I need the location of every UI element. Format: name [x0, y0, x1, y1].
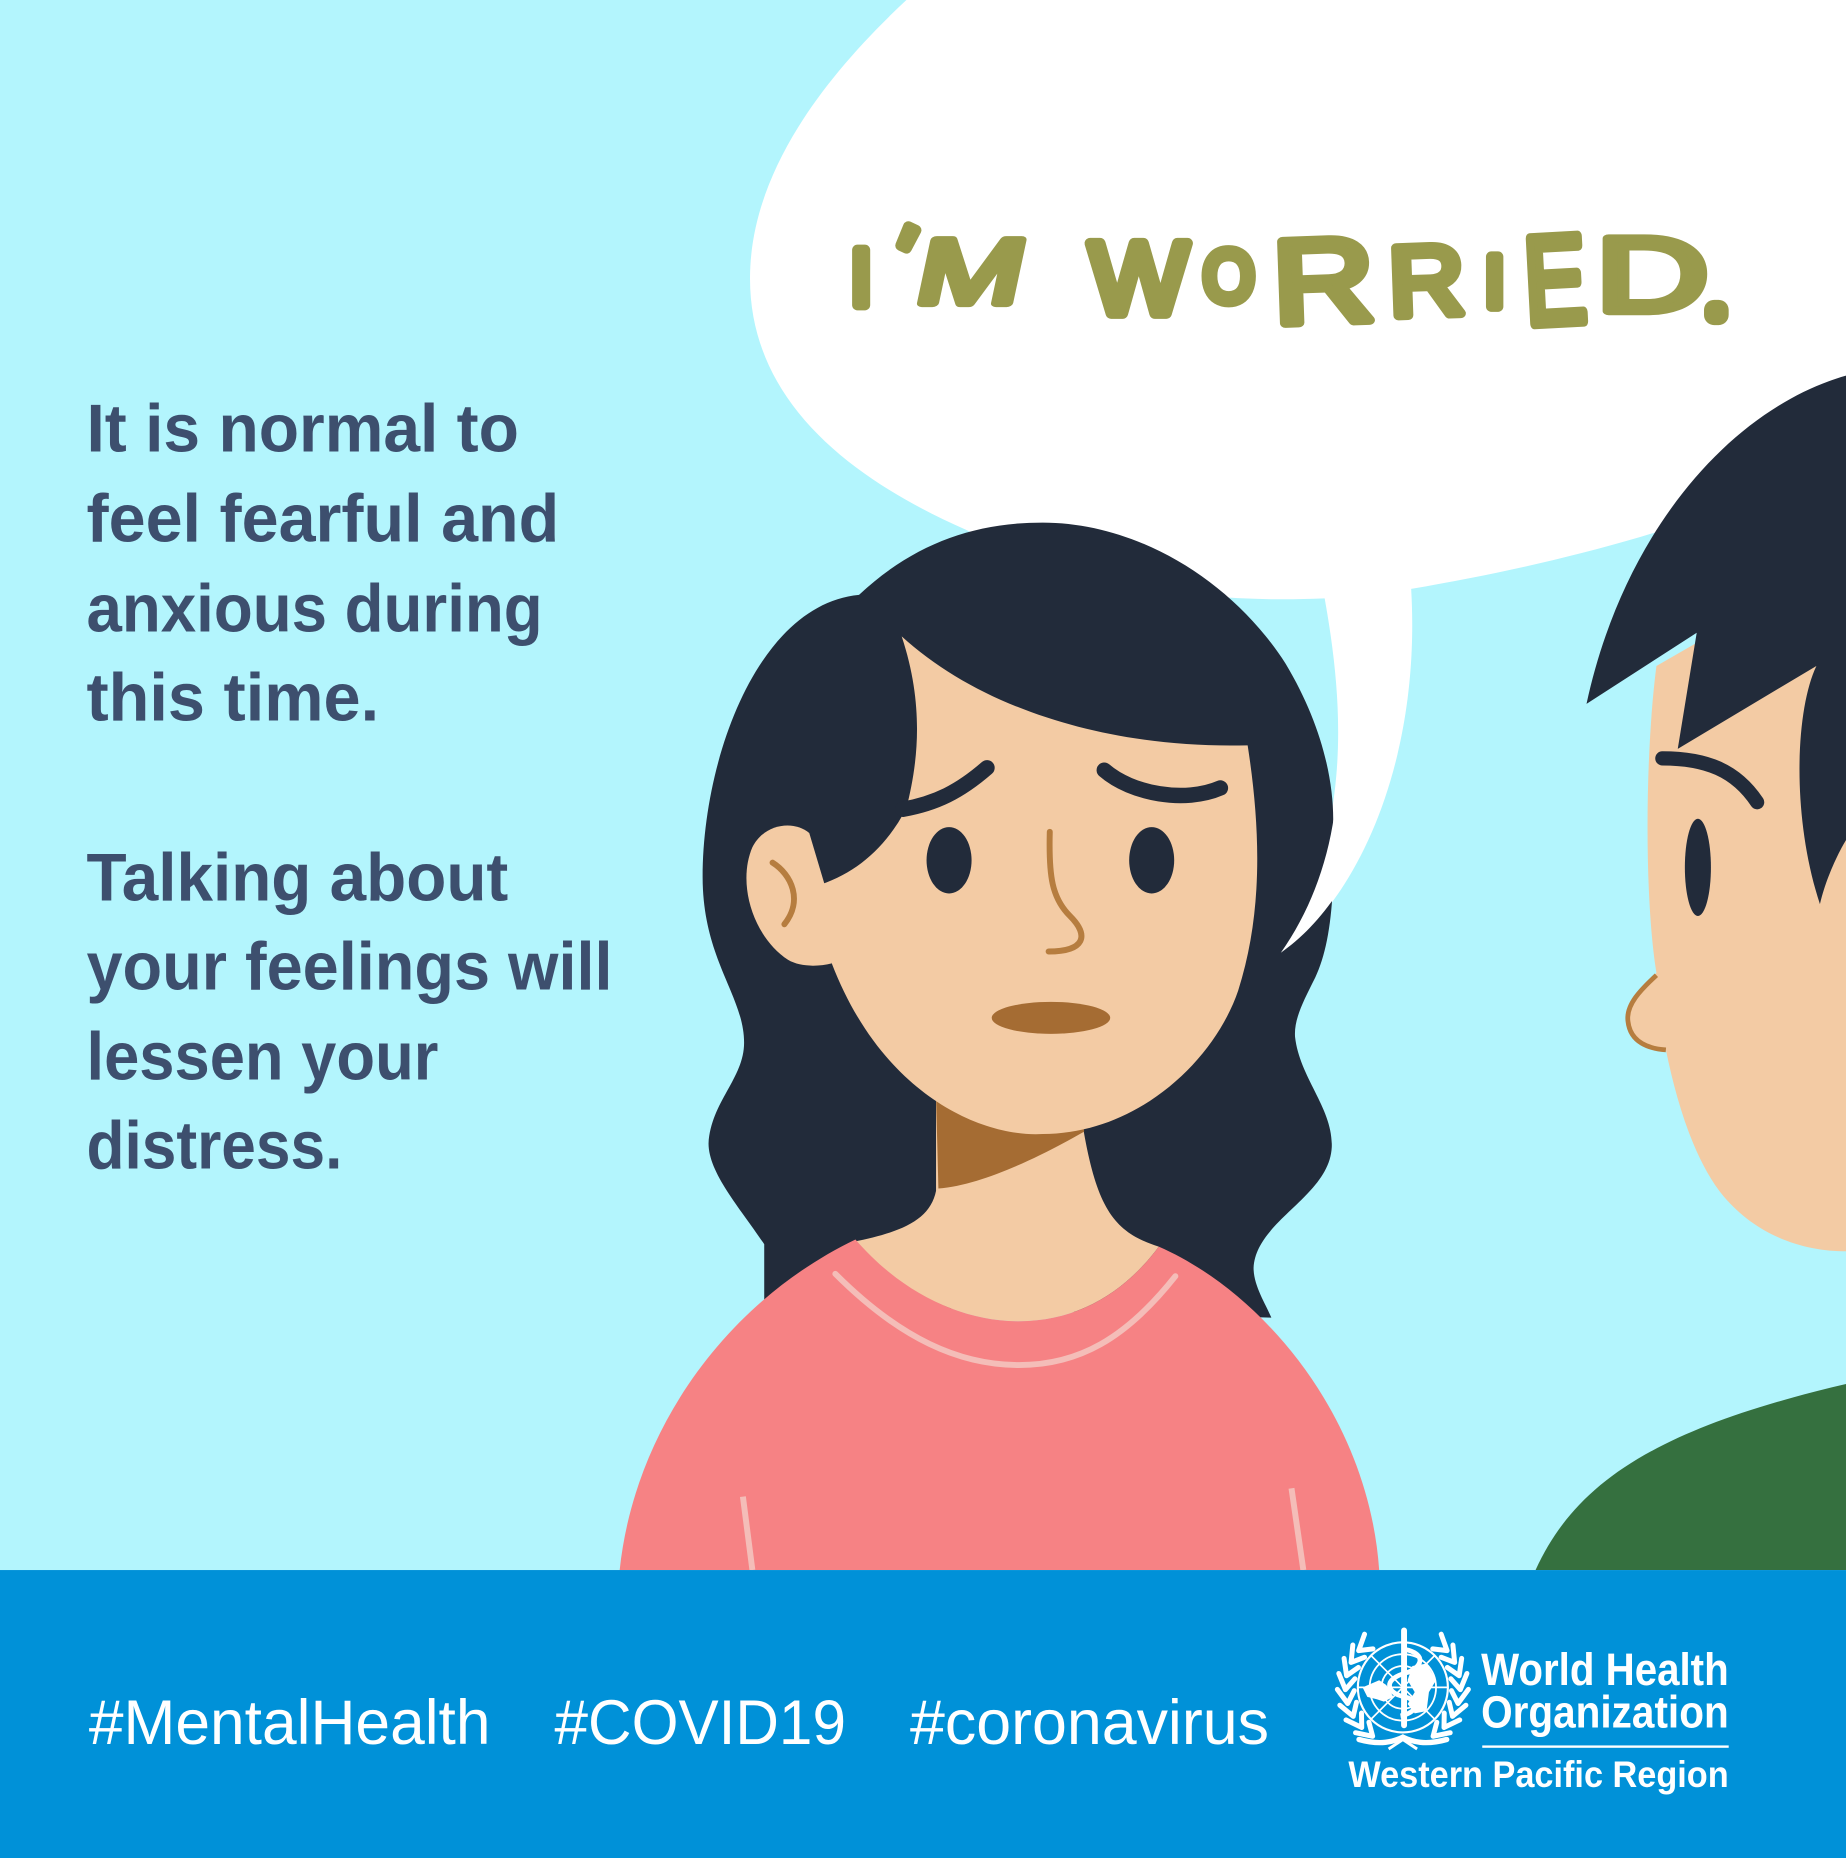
speech text: I'm worried: ' [868, 207, 929, 310]
hashtags: #COVID19 [555, 1688, 846, 1758]
woman hair back [703, 523, 1333, 1318]
WHO name: Western Pacific Region [1348, 1754, 1729, 1795]
man eyebrow [1662, 758, 1757, 802]
body text: anxious during [86, 572, 543, 647]
footer band [0, 1570, 1846, 1858]
speech text: I'm worried: R [1270, 214, 1377, 349]
body text: your feelings will [86, 929, 613, 1004]
hashtags [89, 1688, 1269, 1758]
speech text: I'm worried: I [1485, 242, 1505, 322]
woman ear [746, 826, 832, 966]
man face [1628, 557, 1846, 1251]
man shirt [1536, 1384, 1846, 1570]
speech bubble tail tip over hair [1281, 815, 1339, 953]
speech text: I'm worried: O [1203, 238, 1254, 318]
woman shirt [620, 1239, 1379, 1570]
body text: feel fearful and [86, 482, 559, 557]
man nose outline [1628, 975, 1666, 1050]
man eye [1685, 819, 1711, 916]
ear inner line [773, 863, 794, 924]
woman character [620, 523, 1379, 1570]
eyebrows [903, 768, 1220, 809]
sleeve lines [743, 1488, 1303, 1570]
speech text: I'm worried: E [1521, 209, 1590, 351]
nose [1049, 832, 1081, 952]
neck shadow [936, 1096, 1084, 1189]
WHO name [1348, 1644, 1729, 1795]
shirt collar line [835, 1274, 1175, 1365]
WHO emblem [1337, 1630, 1469, 1749]
speech text: I'm worried [850, 207, 1723, 351]
WHO logo [1337, 1630, 1729, 1795]
speech bubble [750, 0, 1846, 952]
body text: this time. [86, 660, 379, 735]
eyes [927, 827, 1174, 893]
mouth [992, 1002, 1110, 1034]
speech text: I'm worried: M [908, 220, 1035, 323]
speech text: I'm worried: R [1387, 224, 1466, 337]
speech text: I'm worried: W [1089, 221, 1188, 335]
man character [1536, 376, 1846, 1570]
speech text: I'm worried: I [850, 233, 872, 322]
man hair [1587, 376, 1846, 904]
woman neck [853, 1096, 1159, 1321]
body text: It is normal to [86, 391, 519, 466]
body text: Talking about [86, 841, 508, 916]
body text [86, 391, 613, 1183]
body text: lessen your [86, 1019, 438, 1094]
hashtags: #coronavirus [910, 1688, 1269, 1758]
hashtags: #MentalHealth [89, 1688, 491, 1758]
WHO name: World Health [1481, 1644, 1729, 1695]
speech text: I'm worried: . [1710, 273, 1723, 326]
speech text: I'm worried: D [1596, 217, 1709, 334]
WHO name: Organization [1481, 1687, 1729, 1738]
woman face [815, 636, 1257, 1134]
body text: distress. [86, 1108, 342, 1183]
